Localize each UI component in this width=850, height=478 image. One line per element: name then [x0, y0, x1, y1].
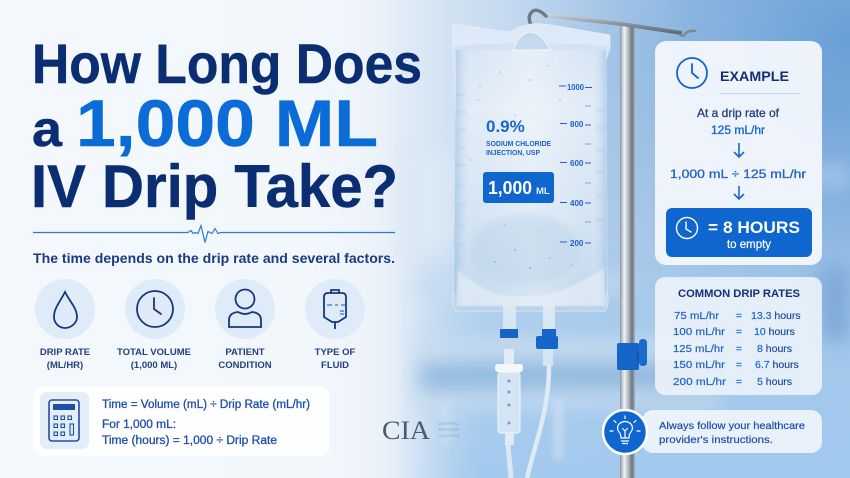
side folds — [457, 95, 605, 245]
graduation scale: 600 — [570, 159, 584, 168]
lower liquid crease — [456, 268, 606, 306]
formula card — [33, 386, 330, 456]
watermark logo: CIA — [382, 416, 430, 445]
result box — [666, 208, 812, 257]
icon: clock — [677, 58, 707, 88]
right arm hook — [680, 31, 696, 36]
rates table: 100 mL/hr — [673, 326, 726, 338]
rates table: 10 hours — [754, 326, 795, 338]
result box: = 8 HOURS — [708, 219, 800, 237]
calculation steps: 125 mL/hr — [711, 123, 765, 137]
example heading: EXAMPLE — [720, 68, 789, 84]
factor: total volume: TOTAL VOLUME — [117, 347, 191, 358]
icon: person — [229, 290, 261, 327]
factor: drip rate — [35, 279, 95, 371]
rates table: = — [736, 343, 742, 355]
right tube and port — [527, 303, 558, 478]
water droplets — [469, 65, 573, 269]
top seal — [453, 24, 610, 46]
graduation scale: 200 — [570, 239, 584, 248]
callout: healthcare provider tip — [603, 410, 822, 454]
pole arm — [544, 13, 682, 35]
rates table: = — [736, 359, 742, 371]
calculation steps: 1,000 mL ÷ 125 mL/hr — [670, 167, 806, 181]
watermark logo: ALLIANCE — [438, 433, 460, 438]
result box: to empty — [727, 239, 771, 251]
rates table: 5 hours — [757, 376, 792, 388]
factor: total volume — [117, 279, 191, 371]
panel: common drip rates — [655, 277, 822, 395]
icon: clock — [137, 291, 173, 327]
arrows — [734, 143, 744, 199]
title — [31, 32, 422, 220]
factor: type of fluid — [305, 279, 365, 371]
subtitle: The time depends on the drip rate and several factors. — [33, 251, 395, 266]
graduation scale — [559, 83, 592, 248]
left bag hook — [529, 10, 546, 30]
calculation steps: At a drip rate of — [697, 106, 780, 120]
factor: patient condition: CONDITION — [218, 360, 272, 371]
icon: IV bag — [324, 290, 346, 329]
title: a — [32, 101, 63, 157]
formula text: Time = Volume (mL) ÷ Drip Rate (mL/hr) — [102, 399, 310, 411]
volume badge: ML — [536, 186, 550, 197]
factor: patient condition — [215, 279, 275, 371]
factor: total volume: (1,000 ML) — [131, 360, 177, 371]
calculation steps — [670, 106, 806, 181]
volume badge — [483, 172, 554, 203]
rates table: 150 mL/hr — [673, 359, 726, 371]
watermark logo: INFUSION — [438, 427, 460, 432]
title: 1,000 ML — [76, 86, 378, 160]
rates table: 200 mL/hr — [673, 376, 727, 388]
icon: calculator — [40, 392, 89, 449]
rates table: 75 mL/hr — [674, 310, 720, 322]
factor: type of fluid: FLUID — [321, 360, 349, 371]
IV pole with arm, hook and clamp — [529, 10, 696, 478]
watermark logo: CENTRAL — [438, 421, 460, 426]
rates table: = — [736, 326, 742, 338]
pole shaft — [620, 26, 635, 478]
volume badge: 1,000 — [488, 178, 532, 198]
factor: patient condition: PATIENT — [225, 347, 265, 358]
callout: healthcare provider tip: Always follow your healthcare — [659, 420, 805, 432]
rates table: = — [736, 376, 742, 388]
formula text — [102, 399, 310, 447]
bag label: SODIUM CHLORIDE — [486, 139, 551, 148]
title: How Long Does — [32, 32, 422, 95]
formula text: Time (hours) = 1,000 ÷ Drip Rate — [102, 435, 277, 447]
graduation scale: 400 — [570, 199, 584, 208]
rates table: 8 hours — [757, 343, 792, 355]
rates table: 13.3 hours — [751, 310, 801, 322]
rates table: = — [736, 310, 742, 322]
panel: common drip rates: COMMON DRIP RATES — [678, 288, 800, 300]
bag label: INJECTION, USP — [486, 148, 540, 157]
factor: drip rate: DRIP RATE — [40, 347, 90, 358]
rates table: 125 mL/hr — [673, 343, 725, 355]
rates table — [673, 310, 801, 388]
factor: drip rate: (ML/HR) — [47, 360, 83, 371]
graduation scale: 800 — [570, 120, 584, 129]
heartbeat divider — [33, 226, 395, 242]
bag body — [453, 24, 610, 311]
panel: example — [655, 41, 822, 265]
graduation scale: 1000 — [567, 83, 585, 92]
factor: type of fluid: TYPE OF — [315, 347, 356, 358]
left tube and drip chamber — [495, 302, 523, 478]
title: IV Drip Take? — [31, 153, 398, 220]
callout: healthcare provider tip: provider's instructions. — [659, 434, 773, 446]
IV bag — [453, 24, 610, 311]
watermark logo — [382, 416, 460, 445]
bag label — [486, 117, 551, 157]
rates table: 6.7 hours — [755, 359, 799, 371]
icon: light bulb — [603, 410, 647, 454]
formula text: For 1,000 mL: — [102, 419, 176, 431]
icon: water drop — [54, 292, 77, 328]
blue clamp — [617, 339, 647, 370]
bag label: 0.9% — [486, 117, 525, 136]
hanging hole — [513, 32, 550, 50]
